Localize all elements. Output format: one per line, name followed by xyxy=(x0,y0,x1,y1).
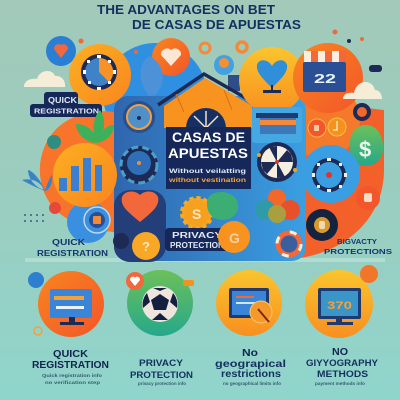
text: quick registration mid: REGISTRATION xyxy=(37,249,108,258)
panel: no geographical restrictions: No xyxy=(242,348,258,359)
icon: blue leaf xyxy=(141,56,163,97)
icon: green leaves xyxy=(76,110,114,143)
icon: small dots xyxy=(78,30,364,54)
title panel: casas de apuestas: Without veilatting xyxy=(169,168,246,175)
icon: lifebuoy xyxy=(277,232,301,256)
label: privacy protection pill: PROTECTION xyxy=(170,241,224,250)
label: quick registration pill: REGISTRATION xyxy=(34,106,99,116)
panel: privacy protection: privacy protection info xyxy=(138,381,186,386)
icon: blue chip circle xyxy=(302,145,360,203)
icon: large orange heart xyxy=(122,191,158,222)
icon: orange G coin xyxy=(218,221,250,253)
icon: black ring xyxy=(306,209,338,241)
icon: cloud left xyxy=(24,71,65,87)
background blobs xyxy=(40,43,384,258)
label: privacy protection pill: PRIVACY xyxy=(172,231,223,240)
central blue panel xyxy=(114,96,306,262)
icon: small orange coin xyxy=(113,233,129,249)
icon: casino chip on orange circle xyxy=(69,44,131,106)
icon: dartboard xyxy=(257,142,297,182)
title panel: casas de apuestas: CASAS DE xyxy=(172,129,245,145)
icon: round buttons xyxy=(308,118,346,137)
title panel: casas de apuestas: APUESTAS xyxy=(168,145,248,161)
icon: heart on orange ball xyxy=(152,38,190,76)
icon: orange side badge xyxy=(49,202,61,214)
text: privacy protections: PROTECTIONS xyxy=(324,247,392,256)
label: quick registration pill xyxy=(30,92,102,117)
icon: calendar shop on orange circle xyxy=(293,43,363,113)
title: DE CASAS DE APUESTAS xyxy=(132,17,301,32)
icon: orange side badge right xyxy=(356,186,380,210)
icon: dark glasses xyxy=(369,65,382,72)
text: privacy protections: BIGVACTY xyxy=(337,237,377,246)
icon: heart badge xyxy=(46,36,76,66)
title: THE ADVANTAGES ON BET xyxy=(97,2,275,17)
panel: quick registration xyxy=(28,271,109,385)
panel: quick registration: REGISTRATION xyxy=(32,360,109,371)
icon: gear: S xyxy=(192,206,201,222)
panel: quick registration: no verification step xyxy=(45,380,100,385)
chart: bar chart on orange circle xyxy=(53,143,117,207)
title panel: casas de apuestas xyxy=(166,127,251,189)
house: roof and orange gable xyxy=(158,74,258,128)
title xyxy=(97,2,301,32)
icon: gear xyxy=(182,198,212,228)
panel: no geography methods: 370 xyxy=(327,300,352,312)
text: quick registration mid: QUICK xyxy=(52,238,85,247)
icon: teal leaves xyxy=(22,170,52,191)
panel: no geographical restrictions: no geographical limits info xyxy=(223,381,281,386)
label: privacy protection pill xyxy=(165,228,229,251)
text: privacy protections xyxy=(324,237,392,256)
icon: casino chip center-left xyxy=(120,146,158,184)
icon: green dollar badge: $ xyxy=(359,137,371,162)
panel: no geographical restrictions xyxy=(215,270,286,386)
panel: no geography methods: METHODS xyxy=(317,369,368,380)
icon: green dollar badge xyxy=(349,125,383,166)
icon: green blob xyxy=(207,192,238,220)
panel: quick registration: QUICK xyxy=(53,349,89,360)
icon: teal plant pot xyxy=(47,135,61,149)
icon: question coin: ? xyxy=(142,239,150,254)
panel: privacy protection: PROTECTION xyxy=(130,370,193,381)
panel: no geography methods: GIYYOGRAPHY xyxy=(306,358,378,368)
icon: blue coin xyxy=(84,207,110,233)
icon: dot grid xyxy=(24,214,44,222)
panel: no geography methods xyxy=(305,265,378,386)
panel: no geography methods: payment methods info xyxy=(315,381,365,386)
icon: cloud right xyxy=(343,82,382,99)
panel: no geography methods: NO xyxy=(332,347,348,358)
title panel: casas de apuestas: without vestination xyxy=(168,177,246,184)
panel: no geographical restrictions: geograpical xyxy=(215,359,286,370)
icon: blue credit card panel xyxy=(252,107,302,143)
text: quick registration mid xyxy=(37,238,108,258)
panel: privacy protection xyxy=(126,270,194,386)
icon: small dial xyxy=(123,101,155,133)
label: quick registration pill: QUICK xyxy=(48,96,77,105)
panel: quick registration: Quick registration info xyxy=(42,373,102,378)
icon: heart on yellow circle xyxy=(239,47,305,113)
panel: privacy protection: PRIVACY xyxy=(139,358,184,369)
icon: calendar shop on orange circle: 22 xyxy=(314,71,336,86)
icon: balls cluster xyxy=(255,189,300,223)
icon: question coin xyxy=(132,232,160,260)
icon: rings xyxy=(200,42,369,119)
icon: orange G coin: G xyxy=(229,230,240,246)
panel: no geographical restrictions: restrictions xyxy=(221,369,281,380)
